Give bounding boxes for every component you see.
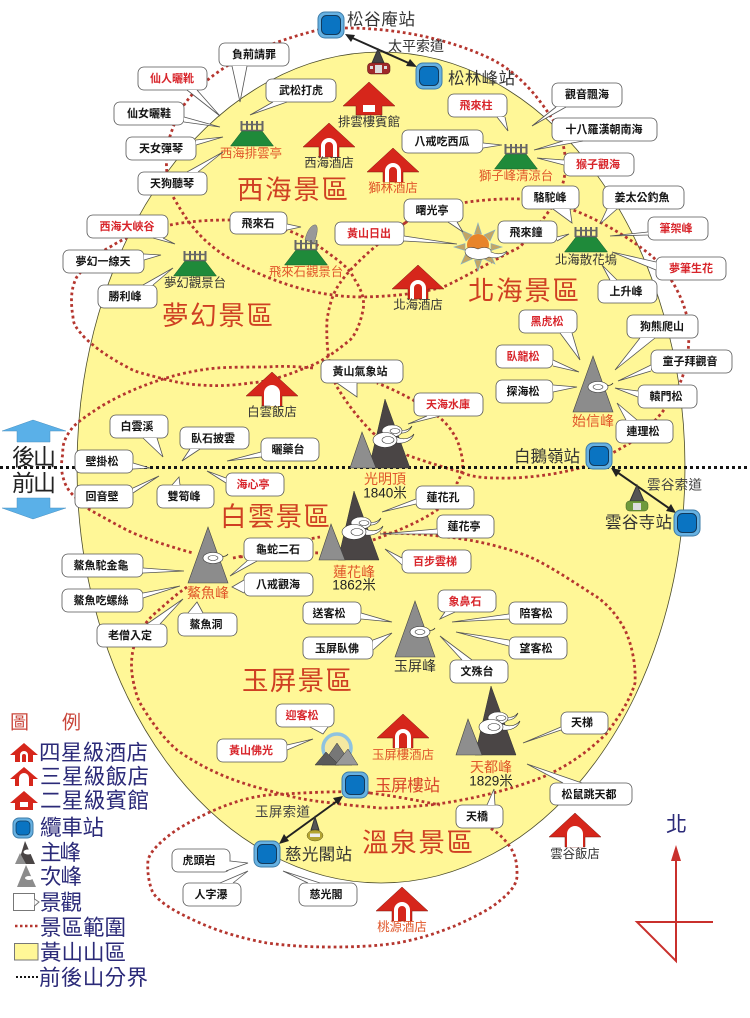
callout: 玉屏臥佛 <box>303 633 392 659</box>
callout: 望客松 <box>456 632 567 659</box>
secondary peak: 玉屏峰 <box>394 601 436 674</box>
callout: 姜太公釣魚 <box>600 186 684 224</box>
callout: 文殊台: 文殊台 <box>460 664 494 678</box>
callout: 黃山日出: 黃山日出 <box>347 226 391 240</box>
callout: 象鼻石 <box>438 590 496 619</box>
callout: 回音壁: 回音壁 <box>86 489 118 503</box>
callout: 負荊請罪 <box>219 43 289 102</box>
legend <box>10 712 149 990</box>
scenic zone boundaries <box>62 28 689 947</box>
label: 後山: 後山 <box>12 444 56 470</box>
callout: 雙筍峰 <box>157 477 214 508</box>
callout: 曬藥台 <box>227 438 319 461</box>
viewpoint: 西海排雲亭 <box>220 121 282 160</box>
legend title: 圖例 <box>10 712 81 734</box>
callout: 曙光亭 <box>404 199 463 232</box>
legend: 主峰: 主峰 <box>40 841 81 865</box>
callout: 天海水庫: 天海水庫 <box>426 397 470 411</box>
legend: 次峰: 次峰 <box>40 865 82 889</box>
main peak: 蓮花峰: 蓮花峰 <box>333 564 375 580</box>
callout: 臥龍松: 臥龍松 <box>506 349 540 363</box>
boundary: baiyun to lianhua <box>233 537 320 558</box>
zone title: 北海景區: 北海景區 <box>468 276 579 306</box>
compass: north arrow <box>637 814 713 961</box>
callout: 童子拜觀音 <box>618 350 732 381</box>
callout: 仙人曬靴 <box>138 67 220 116</box>
cableway: 太平索道: 太平索道 <box>388 38 444 54</box>
boundary: wenquan loop <box>148 792 517 947</box>
callout: 迎客松: 迎客松 <box>286 708 318 722</box>
callout: 觀音飄海 <box>532 83 622 126</box>
callout: 百步雲梯 <box>385 549 471 573</box>
callout: 黃山氣象站: 黃山氣象站 <box>332 364 388 378</box>
hotel: 排雲樓賓館 <box>338 82 400 129</box>
callout: 百步雲梯: 百步雲梯 <box>413 554 457 568</box>
legend: 三星級飯店: 三星級飯店 <box>40 765 149 789</box>
station: 玉屏樓站: 玉屏樓站 <box>375 776 440 795</box>
callout: 狗熊爬山 <box>615 315 698 370</box>
callout: 童子拜觀音: 童子拜觀音 <box>662 354 718 368</box>
hotel: 排雲樓賓館: 排雲樓賓館 <box>338 114 400 129</box>
boundary: baiyun east loop <box>373 383 463 540</box>
cableway: 玉屏索道 <box>255 796 343 844</box>
callout: 飛來柱: 飛來柱 <box>460 98 492 112</box>
callout: 蓮花孔 <box>382 486 474 512</box>
callout: 虎頭岩: 虎頭岩 <box>182 853 216 867</box>
hotel: 西海酒店 <box>303 123 355 170</box>
callout: 蓮花孔: 蓮花孔 <box>426 490 460 504</box>
station: 白鵝嶺站 <box>514 443 612 469</box>
callout: 探海松: 探海松 <box>506 384 540 398</box>
arrow: back mountain up <box>2 420 66 442</box>
zone title: 白雲景區: 白雲景區 <box>220 502 330 532</box>
callout: 八戒吃西瓜: 八戒吃西瓜 <box>414 134 470 148</box>
callout: 轅門松: 轅門松 <box>650 389 682 403</box>
station: 玉屏樓站 <box>342 772 440 798</box>
main peak: 光明頂 <box>350 399 414 500</box>
boundary: yuping loop <box>132 533 635 808</box>
main peak: 天都峰: 1829米 <box>469 774 513 788</box>
hotel: 北海酒店 <box>392 265 444 312</box>
callout: 慈光閣 <box>283 871 357 906</box>
callout: 慈光閣: 慈光閣 <box>310 887 342 901</box>
callout: 西海大峽谷: 西海大峽谷 <box>100 219 154 233</box>
icon: sunrise <box>454 223 507 271</box>
callout: 黃山氣象站 <box>321 360 403 397</box>
hotel: 北海酒店: 北海酒店 <box>393 297 443 312</box>
cableway: 雲谷索道: 雲谷索道 <box>647 478 702 492</box>
boundary: beihai loop <box>327 199 689 478</box>
icon: 佛光 mountains <box>315 734 358 765</box>
callout: 飛來鐘 <box>498 221 569 243</box>
callout: 天狗聽琴: 天狗聽琴 <box>150 176 194 190</box>
mountain area: yellow ellipse <box>77 52 685 883</box>
secondary peak: 始信峰 <box>572 356 614 429</box>
icon: green gondola <box>626 485 648 511</box>
viewpoint: 夢幻觀景台: 夢幻觀景台 <box>164 275 226 290</box>
callout: 探海松 <box>496 380 577 403</box>
callout: 仙人曬靴: 仙人曬靴 <box>150 71 194 85</box>
label: 北: 北 <box>666 814 687 836</box>
callout: 人字瀑 <box>183 871 248 906</box>
callout: 海心亭: 海心亭 <box>236 477 270 491</box>
hotel: 白雲飯店 <box>246 372 298 419</box>
callout: 曬藥台: 曬藥台 <box>272 442 304 456</box>
hotel: 獅林酒店: 獅林酒店 <box>368 181 418 195</box>
arrow: front mountain down <box>2 498 66 519</box>
viewpoint: 西海排雲亭: 西海排雲亭 <box>220 146 282 160</box>
legend: 四星級酒店: 四星級酒店 <box>39 741 148 765</box>
callout: 天女彈琴: 天女彈琴 <box>139 141 183 155</box>
icon: olive gondola <box>307 817 323 841</box>
callout: 十八羅漢朝南海 <box>534 118 657 150</box>
callout: 白雲溪: 白雲溪 <box>120 419 154 433</box>
viewpoint: 北海散花塢: 北海散花塢 <box>555 252 617 267</box>
callout: 黑虎松 <box>519 310 580 360</box>
hotel: 玉屏樓酒店 <box>372 714 434 762</box>
callout: 仙女曬鞋: 仙女曬鞋 <box>127 106 171 120</box>
secondary peak: 鰲魚峰: 鰲魚峰 <box>187 585 229 601</box>
callout: 壁掛松: 壁掛松 <box>86 454 118 468</box>
callout: 人字瀑: 人字瀑 <box>194 887 228 901</box>
callout: 老僧入定: 老僧入定 <box>108 628 152 642</box>
callout: 十八羅漢朝南海: 十八羅漢朝南海 <box>566 122 642 136</box>
callout: 松鼠跳天都 <box>527 764 632 805</box>
legend: 前後山分界: 前後山分界 <box>39 966 148 990</box>
callout: 龜蛇二石 <box>230 538 313 576</box>
callout: 夢筆生花 <box>612 252 726 280</box>
callout: 仙女曬鞋 <box>114 102 220 127</box>
callout: 黑虎松: 黑虎松 <box>530 314 564 328</box>
hotel: 白雲飯店: 白雲飯店 <box>247 404 297 419</box>
callout: 壁掛松 <box>75 450 150 473</box>
legend: 纜車站: 纜車站 <box>40 816 104 840</box>
callout: 上升峰: 上升峰 <box>610 284 642 298</box>
callout: 夢幻一線天 <box>63 250 161 273</box>
zone title: 夢幻景區: 夢幻景區 <box>162 301 273 331</box>
callout: 文殊台 <box>440 636 508 683</box>
label: 前山: 前山 <box>12 470 56 496</box>
callout: 曙光亭: 曙光亭 <box>416 203 448 217</box>
callout: 臥石披雲 <box>180 427 249 461</box>
cableway: 雲谷索道 <box>611 468 702 513</box>
callout: 象鼻石: 象鼻石 <box>448 594 482 608</box>
zone title: 溫泉景區: 溫泉景區 <box>362 828 473 858</box>
station: 松谷庵站: 松谷庵站 <box>347 10 415 29</box>
callout: 飛來鐘: 飛來鐘 <box>510 225 542 239</box>
callout: 轅門松 <box>615 385 697 408</box>
callout: 猴子觀海 <box>537 153 634 176</box>
callout: 猴子觀海: 猴子觀海 <box>576 157 620 171</box>
main peak: 天都峰 <box>456 686 520 788</box>
legend: 景區範圍: 景區範圍 <box>40 916 126 940</box>
legend: 二星級賓館: 二星級賓館 <box>40 789 149 813</box>
callout: 八戒吃西瓜 <box>402 130 502 153</box>
callout: 老僧入定 <box>97 599 183 647</box>
callout: 天海水庫 <box>408 393 483 424</box>
callout: 觀音飄海: 觀音飄海 <box>565 87 609 101</box>
callout: 臥石披雲: 臥石披雲 <box>191 431 235 445</box>
secondary peak: 始信峰: 始信峰 <box>572 413 614 429</box>
callout: 送客松: 送客松 <box>312 606 346 620</box>
hotel: 桃源酒店: 桃源酒店 <box>377 919 427 934</box>
callout: 連理松 <box>616 403 673 443</box>
callout: 臥龍松 <box>496 345 579 372</box>
callout: 武松打虎: 武松打虎 <box>279 83 323 97</box>
callout: 八戒觀海 <box>232 573 313 596</box>
icon: red gondola <box>368 49 390 74</box>
callout: 白雲溪 <box>110 415 168 457</box>
callout: 虎頭岩 <box>172 849 248 872</box>
callout: 狗熊爬山: 狗熊爬山 <box>640 319 684 333</box>
callout: 武松打虎 <box>250 79 336 115</box>
hotel: 桃源酒店 <box>376 887 428 934</box>
station: 雲谷寺站 <box>605 510 700 536</box>
zone title: 西海景區: 西海景區 <box>237 175 348 205</box>
boundary: menghuan loop <box>72 220 364 386</box>
viewpoint: 獅子峰清涼台: 獅子峰清涼台 <box>479 168 553 183</box>
callout: 飛來柱 <box>448 94 508 131</box>
callout: 駱駝峰 <box>522 186 579 223</box>
secondary peak: 鰲魚峰 <box>187 527 229 601</box>
callout: 勝利峰 <box>98 268 173 308</box>
legend: 景觀: 景觀 <box>40 891 82 915</box>
callout: 筆架峰: 筆架峰 <box>660 221 692 235</box>
callout: 海心亭 <box>207 471 284 496</box>
callout: 勝利峰: 勝利峰 <box>108 289 142 303</box>
callout: 夢筆生花: 夢筆生花 <box>669 261 713 275</box>
boundary: north outer loop <box>166 28 566 297</box>
main peak: 光明頂: 光明頂 <box>364 471 406 487</box>
callout: 天橋 <box>456 789 503 828</box>
callout: 西海大峽谷 <box>87 215 175 244</box>
hotel: 雲谷飯店 <box>549 813 601 861</box>
station: 慈光閣站: 慈光閣站 <box>285 845 352 864</box>
callout: 陪客松: 陪客松 <box>520 606 552 620</box>
legend: 景觀 <box>14 891 82 915</box>
callout: 八戒觀海: 八戒觀海 <box>256 577 300 591</box>
callout: 飛來石 <box>230 212 301 234</box>
callout: 回音壁 <box>75 476 159 508</box>
main peak: 蓮花峰: 1862米 <box>332 578 376 592</box>
viewpoint: 北海散花塢 <box>555 227 617 267</box>
callout: 蓮花亭: 蓮花亭 <box>448 519 480 533</box>
viewpoint: 獅子峰清涼台 <box>479 144 553 183</box>
callout: 陪客松 <box>452 602 567 624</box>
station: 白鵝嶺站: 白鵝嶺站 <box>514 447 580 466</box>
callout: 黃山佛光 <box>217 739 313 762</box>
callout: 飛來石: 飛來石 <box>242 216 274 230</box>
callout: 鰲魚吃螺絲 <box>62 586 180 612</box>
callout: 鰲魚吃螺絲: 鰲魚吃螺絲 <box>74 593 128 607</box>
callout: 雙筍峰: 雙筍峰 <box>168 489 200 503</box>
cableway: 太平索道 <box>345 34 444 67</box>
callout: 鰲魚駝金龜 <box>62 554 184 577</box>
boundary: baiyun loop <box>62 366 313 553</box>
main peak: 天都峰: 天都峰 <box>470 759 512 775</box>
callout: 筆架峰 <box>610 217 708 240</box>
callout: 夢幻一線天: 夢幻一線天 <box>76 254 130 268</box>
station: 雲谷寺站: 雲谷寺站 <box>605 513 672 532</box>
callout: 天梯 <box>523 712 608 743</box>
boundary: yupinglou link <box>370 793 440 805</box>
callout: 黃山日出 <box>335 222 457 245</box>
callout: 玉屏臥佛: 玉屏臥佛 <box>315 641 359 655</box>
callout: 望客松: 望客松 <box>520 641 552 655</box>
hotel: 獅林酒店 <box>367 148 419 195</box>
callout: 天橋: 天橋 <box>466 809 488 823</box>
station: 松林峰站: 松林峰站 <box>448 69 515 88</box>
legend: 次峰 <box>17 865 82 889</box>
legend: 主峰 <box>15 841 81 865</box>
callout: 鰲魚駝金龜: 鰲魚駝金龜 <box>74 558 128 572</box>
main peak: 光明頂: 1840米 <box>363 486 407 500</box>
callout: 蓮花亭 <box>380 515 494 538</box>
callout: 天梯: 天梯 <box>571 715 593 729</box>
callout: 天狗聽琴 <box>138 152 223 195</box>
station: 松谷庵站 <box>318 10 415 38</box>
callout: 送客松 <box>303 602 392 624</box>
station: 松林峰站 <box>416 63 515 89</box>
secondary peak: 玉屏峰: 玉屏峰 <box>394 658 436 674</box>
callout: 負荊請罪: 負荊請罪 <box>232 47 276 61</box>
viewpoint: 飛來石觀景台 <box>269 225 343 279</box>
callout: 駱駝峰: 駱駝峰 <box>534 190 566 204</box>
station: 慈光閣站 <box>254 841 352 867</box>
callout: 松鼠跳天都: 松鼠跳天都 <box>562 787 616 801</box>
hotel: 玉屏樓酒店: 玉屏樓酒店 <box>372 747 434 762</box>
front/back mountain divider <box>0 466 750 469</box>
callout: 鰲魚洞: 鰲魚洞 <box>190 617 222 631</box>
callout: 龜蛇二石: 龜蛇二石 <box>256 542 300 556</box>
callout: 上升峰 <box>598 265 657 303</box>
callout: 天女彈琴 <box>126 137 223 160</box>
callout: 鰲魚洞 <box>178 602 237 636</box>
legend: 黃山山區: 黃山山區 <box>40 941 126 965</box>
callout: 姜太公釣魚: 姜太公釣魚 <box>614 190 670 204</box>
main peak: 蓮花峰 <box>319 491 383 592</box>
hotel: 雲谷飯店: 雲谷飯店 <box>550 846 600 861</box>
callout: 迎客松 <box>276 704 334 734</box>
cableway: 玉屏索道: 玉屏索道 <box>255 804 310 820</box>
zone title: 玉屏景區: 玉屏景區 <box>242 666 352 696</box>
viewpoint: 飛來石觀景台: 飛來石觀景台 <box>269 264 343 279</box>
callout: 黃山佛光: 黃山佛光 <box>229 743 273 757</box>
hotel: 西海酒店: 西海酒店 <box>304 155 354 170</box>
callout: 連理松: 連理松 <box>626 424 660 438</box>
viewpoint: 夢幻觀景台 <box>164 251 226 290</box>
